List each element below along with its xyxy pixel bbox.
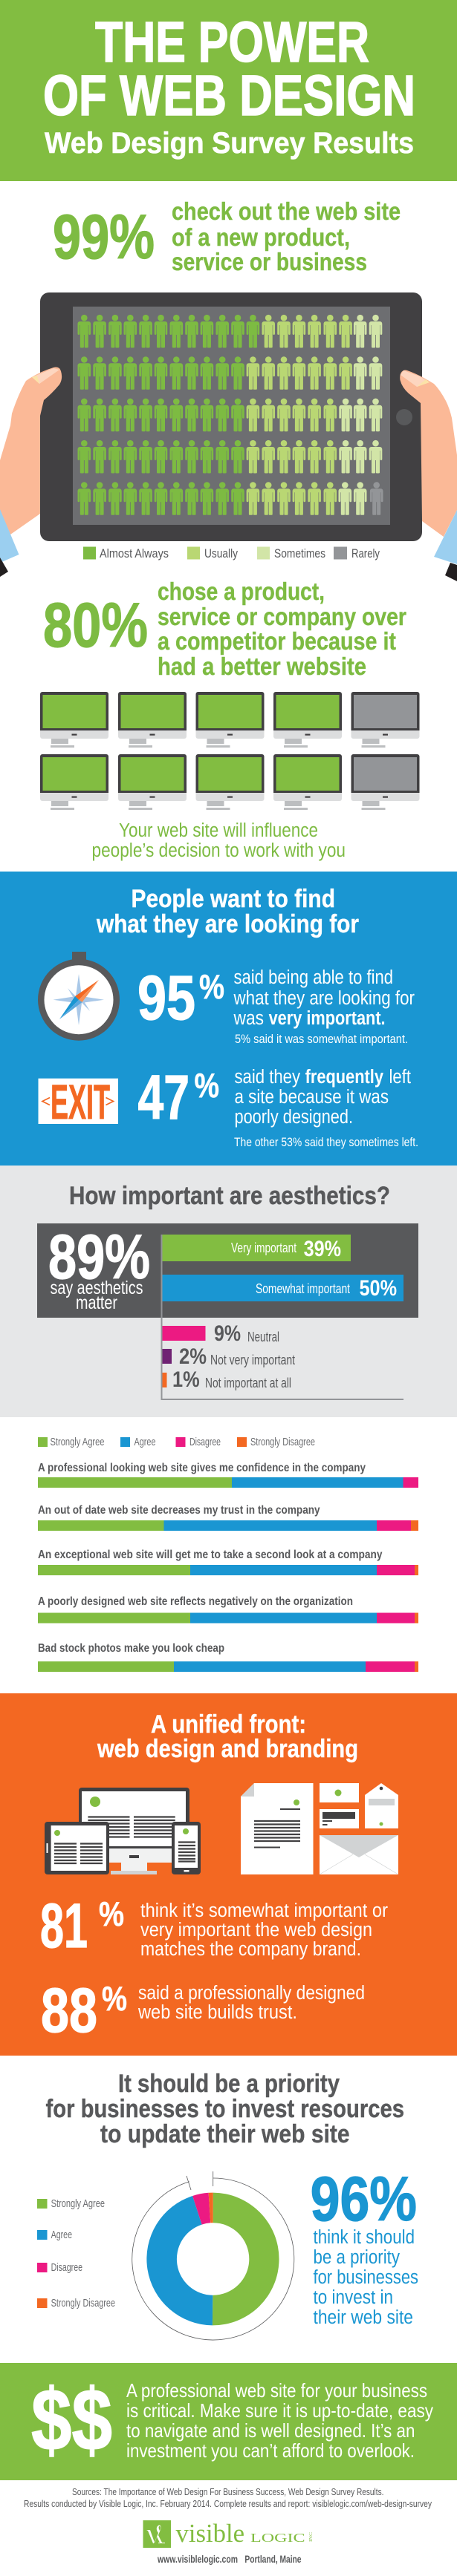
text: influence statement xyxy=(92,820,346,861)
pictogram of people xyxy=(77,315,383,515)
bar chart: importance xyxy=(162,1235,403,1399)
stat: 95 percent: 95 xyxy=(137,963,195,1033)
heading: priority: to update their web site xyxy=(100,2120,350,2148)
heading xyxy=(96,885,359,938)
text: 95 percent description: said being able to find xyxy=(233,967,393,988)
text: website and location: Portland, Maine xyxy=(244,2554,302,2565)
text: 47 percent description: a site because it was xyxy=(235,1087,389,1108)
stat: 80 percent: a competitor because it xyxy=(158,627,396,655)
stat: 96 percent: think it should xyxy=(314,2227,415,2248)
panel: aesthetics xyxy=(0,1166,457,1417)
donut chart xyxy=(132,2171,294,2340)
heading: priority xyxy=(46,2070,404,2148)
text: influence statement: people’s decision to work with you xyxy=(92,840,346,861)
bar chart: importance: Neutral xyxy=(247,1330,279,1344)
bar chart: importance: 39% xyxy=(304,1237,341,1261)
bar chart: importance: 1% xyxy=(172,1367,200,1392)
text: 47 percent description: said they xyxy=(235,1067,300,1088)
heading: web design and branding xyxy=(97,1735,358,1763)
logo: visible logic: LOGIC xyxy=(250,2531,305,2545)
text: influence statement: Your web site will influence xyxy=(119,820,318,841)
heading xyxy=(97,1710,358,1763)
statement bar 2 xyxy=(38,1504,418,1531)
bar chart: importance: 9% xyxy=(214,1321,241,1346)
bar chart: importance: 50% xyxy=(360,1276,397,1301)
text: conclusion xyxy=(126,2379,433,2462)
computer monitors grid xyxy=(40,692,419,810)
text: 47 percent description xyxy=(234,1067,418,1149)
statement bar 1: A professional looking web site gives me confidence in the company xyxy=(38,1462,366,1474)
statement bar 2: An out of date web site decreases my trust in the company xyxy=(38,1504,320,1517)
icon: compass xyxy=(38,952,120,1041)
dark callout panel xyxy=(37,1223,418,1318)
heading: priority: for businesses to invest resources xyxy=(46,2095,404,2123)
stat: 89 percent: matter xyxy=(76,1292,117,1313)
heading: priority: It should be a priority xyxy=(118,2070,340,2098)
legend: agreement: Agree xyxy=(134,1436,156,1448)
legend: donut: Strongly Agree xyxy=(51,2198,105,2210)
statement bar 1 xyxy=(38,1462,418,1488)
panel: unified front xyxy=(0,1693,457,2056)
legend: donut xyxy=(37,2198,115,2309)
stat: 96 percent: be a priority xyxy=(314,2247,400,2268)
bar chart: importance: Not important at all xyxy=(205,1376,291,1390)
legend: agreement: Strongly Disagree xyxy=(250,1436,315,1448)
stacked bars: statements xyxy=(38,1462,418,1672)
heading: what they are looking for xyxy=(96,910,359,938)
text: 95 percent description xyxy=(233,967,415,1046)
text: 47 percent description: The other 53% said they sometimes left. xyxy=(234,1136,418,1149)
legend: donut: Agree xyxy=(51,2229,72,2241)
stat: 96 percent: 96% xyxy=(311,2164,417,2234)
stat: 88 percent: % xyxy=(102,1979,127,2018)
tablet xyxy=(40,292,422,541)
stat: 88 percent: 88 xyxy=(41,1975,97,2045)
stat: 96 percent: their web site xyxy=(314,2307,413,2328)
text: 95 percent description: very important. xyxy=(269,1008,386,1029)
stat: 80 percent: 80% xyxy=(43,590,148,660)
stat: 99 percent: check out the web site xyxy=(172,197,401,225)
stat: 99 percent: 99% xyxy=(53,202,155,272)
statement bar 5 xyxy=(38,1642,418,1672)
logo: visible logic xyxy=(143,2519,314,2548)
stat: 81 percent: 81 xyxy=(40,1891,88,1961)
stat: 47 percent: % xyxy=(195,1066,219,1105)
stat: 81 percent: % xyxy=(99,1895,124,1933)
statement bar 3: An exceptional web site will get me to take a second look at a company xyxy=(38,1549,383,1561)
legend: frequency: Rarely xyxy=(351,546,380,560)
text: 81 percent description xyxy=(140,1900,388,1960)
icon: dollar signs: $$ xyxy=(31,2371,112,2469)
heading: A unified front: xyxy=(151,1710,306,1739)
stat: 89 percent: say aesthetics xyxy=(51,1278,143,1298)
panel: header xyxy=(0,0,457,181)
text: 95 percent description: what they are looking for xyxy=(233,988,415,1009)
icon: left hand xyxy=(0,367,62,577)
title: THE POWER xyxy=(95,10,369,74)
logo: visible logic: visible xyxy=(175,2519,244,2548)
statement bar 4 xyxy=(38,1595,418,1623)
text: 88 percent description: said a professionally designed xyxy=(138,1983,365,2004)
text: 81 percent description: very important the web design xyxy=(140,1920,372,1941)
heading: How important are aesthetics? xyxy=(69,1182,390,1210)
stat: 99 percent: of a new product, xyxy=(172,223,350,251)
stat: 99 percent: service or business xyxy=(172,248,367,275)
text: 81 percent description: matches the company brand. xyxy=(140,1939,361,1960)
legend: frequency: Usually xyxy=(204,546,238,560)
stat: 47 percent: 47 xyxy=(138,1062,189,1132)
panel: conclusion xyxy=(0,2363,457,2480)
stat: 99 percent xyxy=(53,197,401,275)
legend: frequency: Almost Always xyxy=(100,546,169,560)
subtitle: Web Design Survey Results xyxy=(45,127,414,160)
text: 95 percent description: 5% said it was somewhat important. xyxy=(235,1033,408,1046)
text: 47 percent description: frequently xyxy=(305,1067,384,1088)
title xyxy=(43,10,415,128)
legend: frequency: Sometimes xyxy=(274,546,325,560)
text: 47 percent description: left xyxy=(389,1067,411,1088)
stat: 80 percent: service or company over xyxy=(158,603,406,630)
text: 81 percent description: think it’s somewhat important or xyxy=(140,1900,388,1921)
stat: 89 percent: 89% xyxy=(48,1222,150,1292)
legend: agreement: Strongly Agree xyxy=(51,1436,104,1448)
text: 88 percent description: web site builds trust. xyxy=(137,2002,297,2023)
logo: visible logic: INC xyxy=(309,2532,314,2542)
stat: 80 percent: had a better website xyxy=(158,653,366,680)
text: 95 percent description: was xyxy=(233,1008,264,1029)
icon: exit sign: EXIT xyxy=(51,1074,110,1129)
text: conclusion: to navigate and is well designed. It’s an xyxy=(126,2419,415,2442)
heading: People want to find xyxy=(131,885,335,913)
stat: 80 percent xyxy=(43,578,406,680)
icon: right hand xyxy=(400,370,457,581)
bar chart: importance: Not very important xyxy=(210,1353,295,1367)
legend: agreement xyxy=(38,1436,315,1448)
stat: 80 percent: chose a product, xyxy=(158,578,325,605)
text: 47 percent description: poorly designed. xyxy=(235,1107,353,1128)
statement bar 3 xyxy=(38,1549,418,1575)
legend: frequency xyxy=(83,546,380,560)
stat: 96 percent xyxy=(311,2164,418,2328)
statement bar 4: A poorly designed web site reflects negatively on the organization xyxy=(38,1595,353,1608)
legend: agreement: Disagree xyxy=(189,1436,221,1448)
statement bar 5: Bad stock photos make you look cheap xyxy=(38,1642,224,1655)
icon: stationery xyxy=(241,1783,398,1874)
text: sources xyxy=(24,2486,432,2509)
stat: 89 percent xyxy=(48,1222,150,1313)
stat: 96 percent: to invest in xyxy=(314,2287,393,2308)
text: 88 percent description xyxy=(137,1983,365,2023)
text: website and location: www.visiblelogic.com xyxy=(157,2554,238,2565)
text: conclusion: investment you can’t afford to overlook. xyxy=(126,2439,415,2462)
panel: people want to find xyxy=(0,872,457,1166)
legend: donut: Strongly Disagree xyxy=(51,2298,115,2309)
stat: 96 percent: for businesses xyxy=(314,2267,418,2288)
icon: exit sign xyxy=(39,1074,118,1129)
icon: responsive devices xyxy=(45,1788,201,1874)
bar chart: importance: Very important xyxy=(231,1240,296,1255)
legend: donut: Disagree xyxy=(51,2262,82,2274)
bar chart: importance: 2% xyxy=(179,1344,207,1369)
stat: 95 percent: % xyxy=(199,967,224,1006)
bar chart: importance: Somewhat important xyxy=(256,1281,350,1296)
